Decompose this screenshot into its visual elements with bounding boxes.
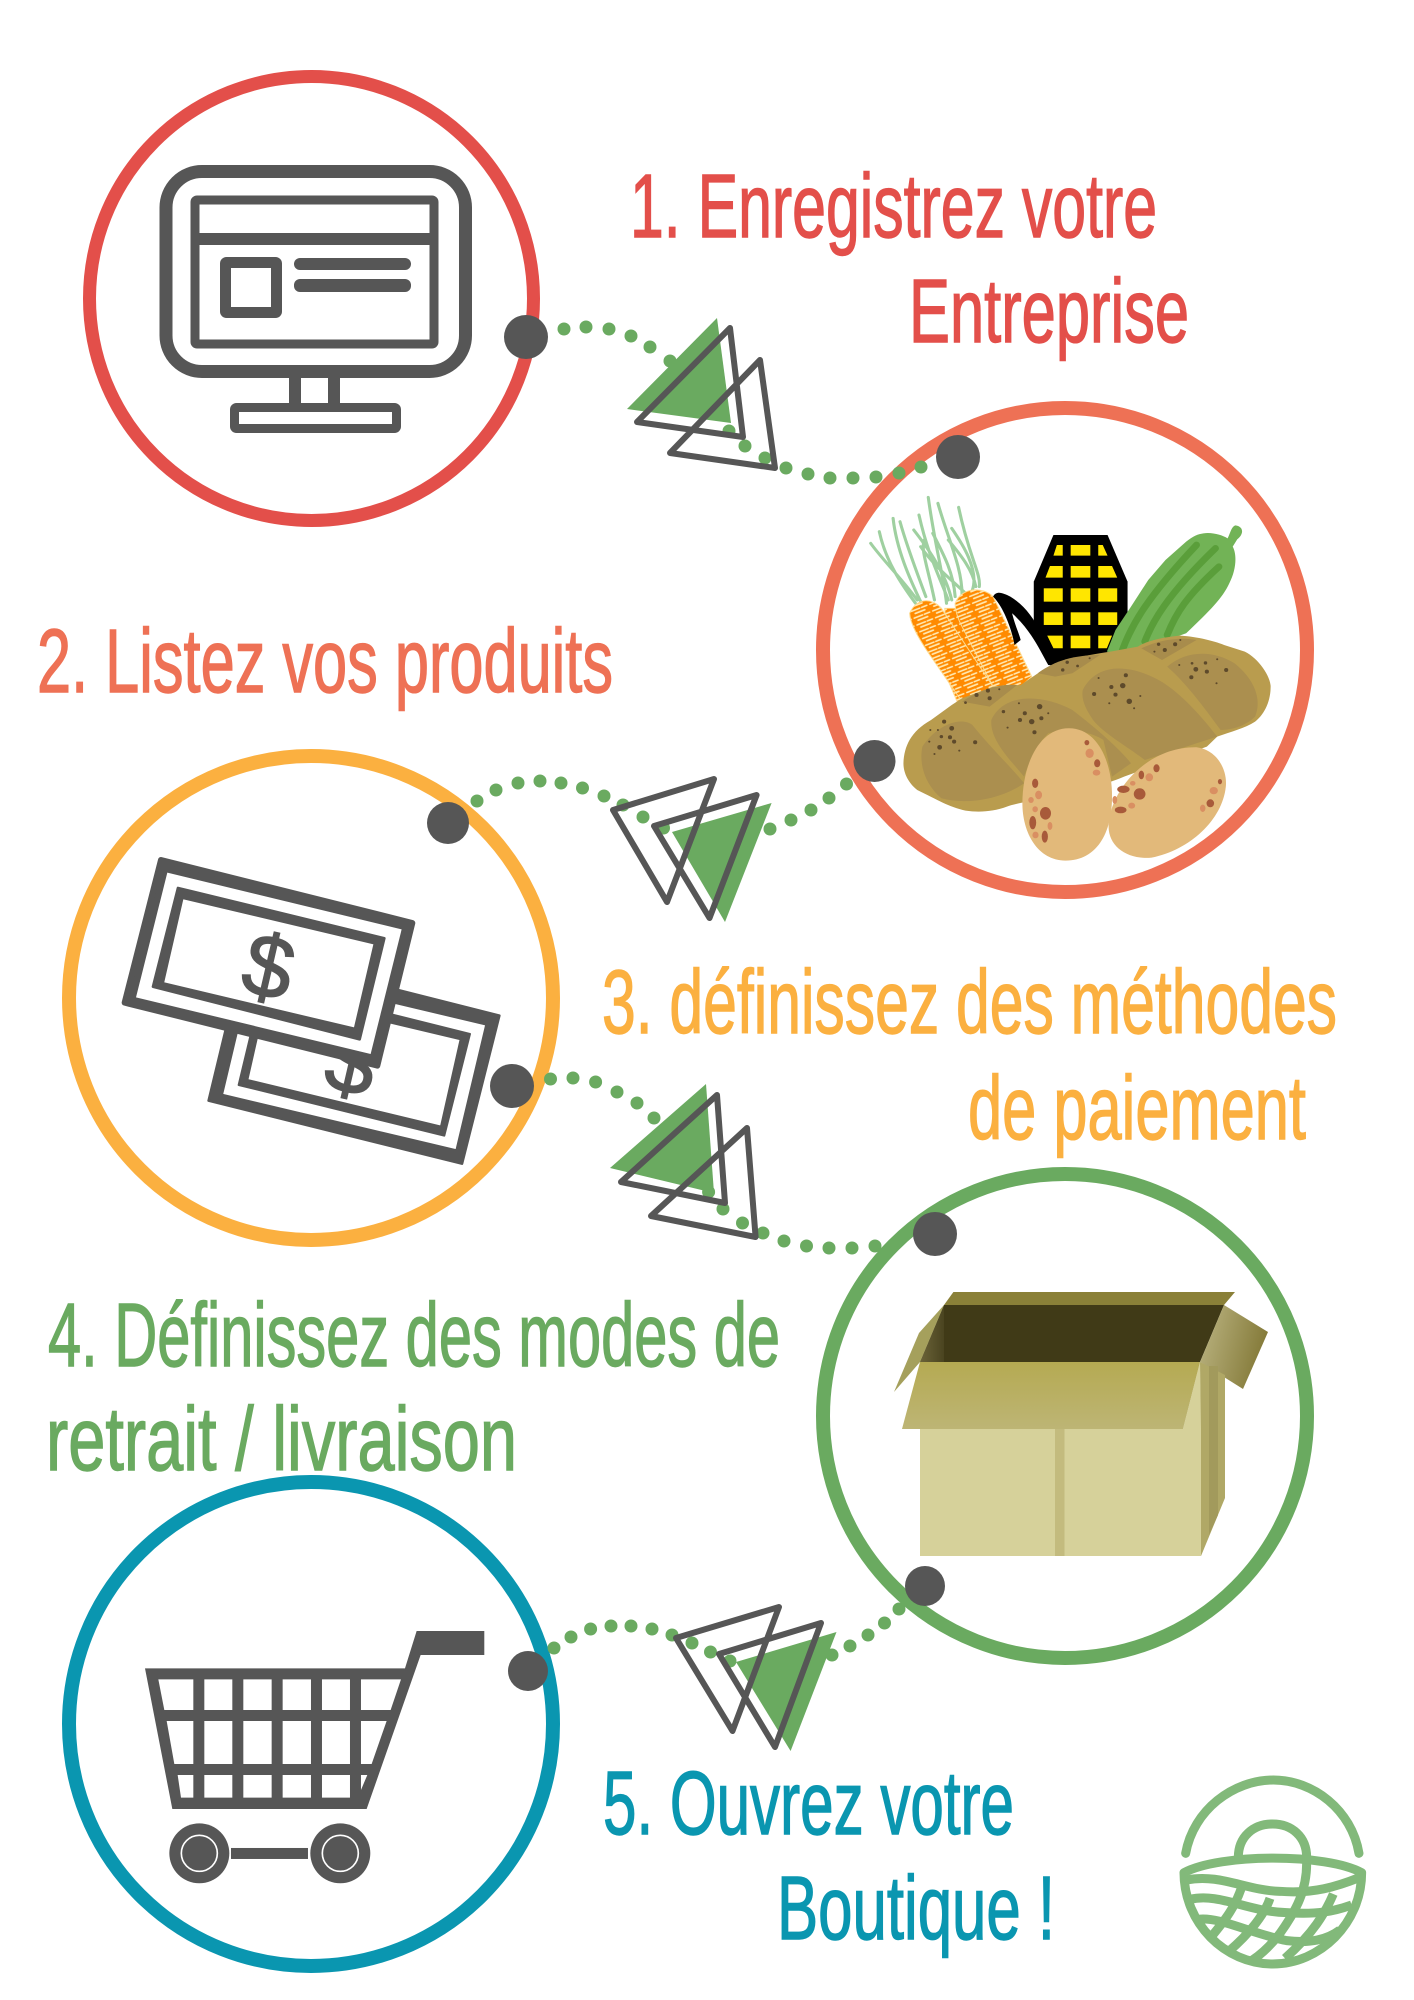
icon: computer monitor (166, 172, 466, 428)
step 5 heading: Boutique ! (777, 1859, 1055, 1959)
arrow triangles 2 (613, 779, 772, 922)
icon: shopping cart (145, 1631, 484, 1883)
step 4: ring (823, 1174, 1307, 1658)
back banknote (209, 951, 499, 1164)
step 5 heading: 5. Ouvrez votre (603, 1754, 1014, 1854)
dotted connector 3 to 4 (544, 1072, 882, 1254)
carrots (910, 590, 1032, 705)
cucumber (1107, 525, 1242, 655)
front banknote dollar: $ (234, 913, 304, 1020)
dotted connector 4 to 5 (548, 1602, 906, 1668)
connector nodes (427, 315, 980, 1691)
logo: green basket (1184, 1780, 1362, 1964)
dotted connector 1 to 2 (558, 320, 928, 484)
step 1 heading: 1. Enregistrez votre (630, 157, 1157, 257)
carrot greens (871, 497, 979, 603)
arrow triangles 4 (676, 1607, 836, 1751)
arrow triangles 3 (610, 1084, 756, 1237)
step 1 heading: Entreprise (909, 262, 1189, 362)
dotted connector 2 to 3 (470, 774, 853, 836)
step 4 heading: retrait / livraison (46, 1390, 517, 1490)
step 3: ring (69, 756, 553, 1240)
icon: banknotes (125, 860, 499, 1164)
arrow triangles 1 (627, 318, 775, 468)
front banknote (125, 860, 412, 1066)
potatoes (1022, 728, 1226, 861)
icon: vegetables and bread (871, 497, 1271, 861)
step 1: ring (90, 76, 534, 520)
back banknote dollar: $ (317, 1009, 387, 1116)
step 4 heading: 4. Définissez des modes de (48, 1286, 780, 1386)
corn (993, 535, 1128, 667)
bread loaf (903, 636, 1271, 812)
step 5: ring (69, 1482, 553, 1966)
step 2: ring (823, 408, 1307, 892)
step 2 heading: 2. Listez vos produits (37, 612, 613, 712)
icon: open cardboard box (894, 1292, 1268, 1556)
